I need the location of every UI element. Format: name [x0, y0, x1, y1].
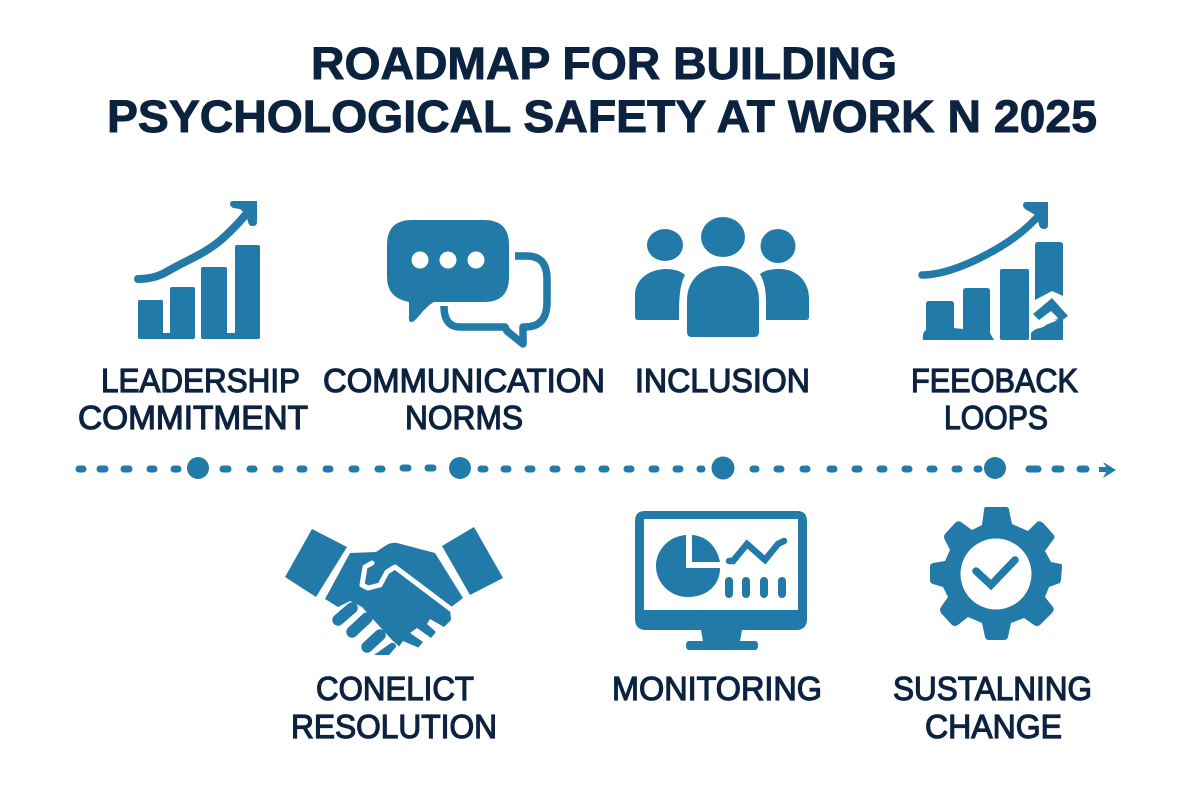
label: leadership commitment — [78, 362, 308, 436]
label: communication norms — [323, 362, 605, 436]
label: conflict resolution: CONELICT — [316, 670, 474, 707]
label: conflict resolution: RESOLUTION — [291, 708, 497, 745]
label: communication norms: NORMS — [405, 399, 523, 436]
icon: leadership commitment rising bar chart — [138, 201, 260, 339]
icon: monitoring dashboard monitor — [635, 511, 807, 650]
icon: communication speech bubbles — [387, 220, 547, 344]
icon: conflict resolution handshake — [285, 527, 503, 655]
label: inclusion: INCLUSION — [635, 362, 810, 399]
label: sustaining change — [893, 670, 1092, 745]
label: feedback loops: LOOPS — [944, 399, 1048, 436]
icon: sustaining change gear with check — [930, 507, 1062, 640]
label: conflict resolution — [291, 670, 497, 745]
line chart — [729, 541, 784, 561]
roadmap timeline — [79, 456, 1116, 480]
label: communication norms: COMMUNICATION — [323, 362, 605, 399]
label: leadership commitment: LEADERSHIP — [101, 362, 300, 399]
icon: feedback loops bar chart — [922, 202, 1068, 340]
label: feedback loops: FEEOBACK — [911, 362, 1078, 399]
icon: inclusion group of people — [635, 217, 809, 337]
label: monitoring: MONITORING — [612, 670, 822, 707]
small bars — [725, 577, 786, 598]
label: leadership commitment: COMMITMENT — [78, 399, 308, 436]
pie chart — [656, 535, 720, 597]
label: sustaining change: CHANGE — [925, 708, 1062, 745]
title: ROADMAP FOR BUILDING — [311, 38, 897, 89]
label: feedback loops — [911, 362, 1078, 436]
title — [107, 38, 1097, 142]
label: sustaining change: SUSTALNING — [893, 670, 1092, 707]
title: PSYCHOLOGICAL SAFETY AT WORK N 2025 — [107, 91, 1097, 142]
